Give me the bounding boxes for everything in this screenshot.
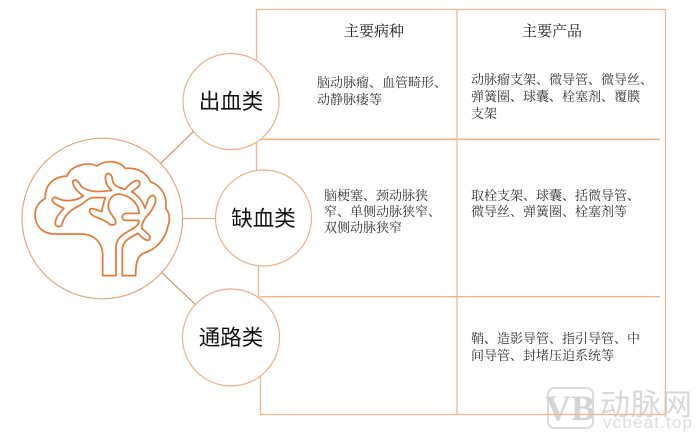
- text: 出血类 products: 弹簧圈、球囊、栓塞剂、覆膜: [471, 89, 640, 104]
- text: 通路类 products: 间导管、封堵压迫系统等: [471, 348, 614, 363]
- watermark: vcbeat logo: 动脉网: [600, 389, 692, 422]
- text: 出血类 products: 支架: [471, 106, 497, 121]
- circle: 缺血类: [216, 170, 312, 266]
- text: 出血类 products: 动脉瘤支架、微导管、微导丝、: [471, 72, 653, 87]
- heading: 主要病种: 主要病种: [344, 23, 404, 40]
- text: 出血类 diseases: [317, 75, 447, 107]
- text: 缺血类 products: 取栓支架、球囊、括微导管、: [471, 188, 640, 203]
- text: 缺血类 diseases: 脑梗塞、颈动脉狭: [324, 188, 428, 203]
- icon: brain in circle: [22, 138, 183, 299]
- circle: 通路类: 通路类: [199, 326, 263, 350]
- watermark: vcbeat logo: VB: [545, 388, 595, 428]
- circle: 通路类: [182, 289, 280, 386]
- text: 通路类 products: [471, 331, 640, 363]
- text: 出血类 diseases: 脑动脉瘤、血管畸形、: [317, 75, 447, 90]
- text: 缺血类 products: 微导丝、弹簧圈、栓塞剂等: [471, 204, 627, 219]
- watermark: vcbeat logo: vcbeat.top: [603, 413, 692, 432]
- watermark: vcbeat logo: [545, 388, 692, 432]
- heading: 主要产品: 主要产品: [522, 23, 582, 40]
- text: 出血类 diseases: 动静脉瘘等: [317, 92, 382, 107]
- circle: 出血类: 出血类: [199, 90, 263, 114]
- text: 缺血类 diseases: 双侧动脉狭窄: [324, 220, 402, 235]
- text: 缺血类 diseases: [324, 188, 441, 235]
- text: 出血类 products: [471, 72, 653, 121]
- connector lines: [159, 129, 216, 306]
- circle: 缺血类: 缺血类: [231, 207, 296, 231]
- circle: 出血类: [183, 54, 279, 150]
- text: 缺血类 products: [471, 188, 640, 219]
- text: 缺血类 diseases: 窄、单侧动脉狭窄、: [324, 204, 441, 219]
- text: 通路类 products: 鞘、造影导管、指引导管、中: [471, 331, 640, 346]
- table grid: [256, 10, 666, 414]
